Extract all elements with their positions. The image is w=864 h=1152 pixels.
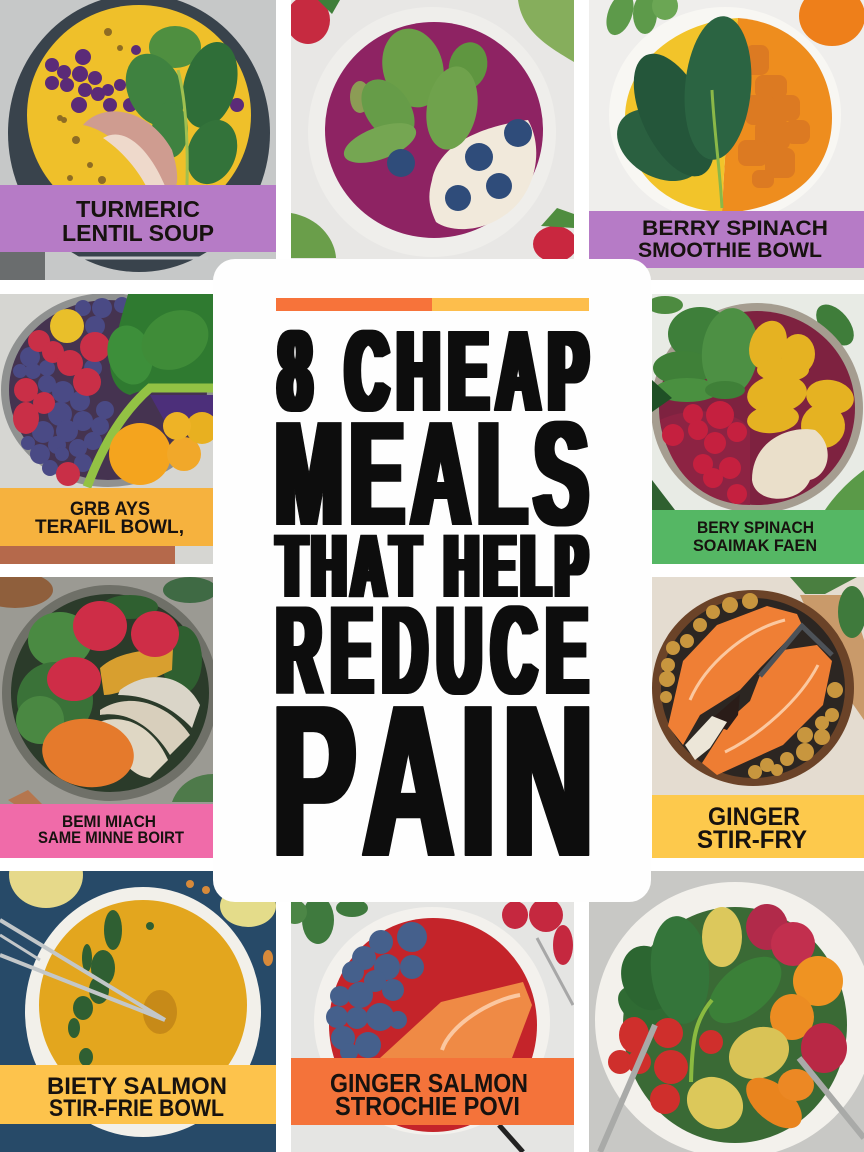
- label: ginger stir-fry: GINGER: [708, 803, 800, 831]
- title: THAT HELP: [278, 518, 593, 616]
- title: PAIN: [273, 662, 601, 901]
- label: ginger salmon strochie povi: [291, 1058, 574, 1125]
- label: biety salmon stir-frie bowl: [0, 1065, 276, 1124]
- title: MEALS: [275, 392, 595, 557]
- panel: berry and banana bowl photo: [652, 294, 864, 510]
- title: REDUCE: [276, 581, 597, 720]
- label: gr ays terafil bowl: [0, 488, 213, 546]
- label: berry spinach smoothie bowl: [589, 211, 864, 268]
- label: bemi miach same minne boirt: [0, 804, 213, 858]
- label: bemi miach same minne boirt: BEMI MIACH: [62, 812, 156, 831]
- panel: salmon and blueberry bowl photo: [283, 896, 574, 1152]
- panel: curry bowl photo: [0, 842, 276, 1152]
- label: bery spinach soaimak faen: [652, 510, 864, 564]
- label: ginger stir-fry: [652, 795, 864, 858]
- accent bar: [276, 298, 589, 311]
- label: bery spinach soaimak faen: BERY SPINACH: [697, 518, 814, 537]
- title: [273, 308, 601, 901]
- label: biety salmon stir-frie bowl: STIR-FRIE BOWL: [49, 1095, 224, 1122]
- label: bery spinach soaimak faen: SOAIMAK FAEN: [693, 536, 817, 555]
- label: gr ays terafil bowl: GRB AYS: [70, 499, 150, 520]
- title: 8 CHEAP: [279, 308, 597, 435]
- panel: rainbow berry bowl photo: [0, 293, 219, 564]
- panel: colourful vegetable bowl photo: [589, 871, 864, 1152]
- label: turmeric lentil soup: TURMERIC: [76, 196, 200, 222]
- panel: turmeric lentil soup: [0, 0, 276, 280]
- label: ginger salmon strochie povi: STROCHIE POVI: [335, 1091, 520, 1121]
- panel: berry smoothie bowl photo: [286, 0, 577, 262]
- label: berry spinach smoothie bowl: BERRY SPINACH: [642, 217, 828, 240]
- label: bemi miach same minne boirt: SAME MINNE BOIRT: [38, 828, 185, 847]
- label: biety salmon stir-frie bowl: BIETY SALMON: [47, 1073, 227, 1100]
- panel: salmon bowl photo: [652, 577, 864, 795]
- label: turmeric lentil soup: LENTIL SOUP: [62, 220, 214, 246]
- label: ginger stir-fry: STIR-FRY: [697, 826, 807, 854]
- label: turmeric lentil soup: [0, 185, 276, 252]
- label: ginger salmon strochie povi: GINGER SALMON: [330, 1068, 528, 1098]
- label: berry spinach smoothie bowl: SMOOTHIE BOWL: [638, 239, 822, 262]
- panel: central title card: [213, 259, 651, 902]
- panel: chicken and strawberry salad photo: [0, 577, 213, 804]
- label: gr ays terafil bowl: TERAFIL BOWL,: [35, 517, 184, 538]
- panel: spinach and carrot bowl photo: [589, 0, 864, 280]
